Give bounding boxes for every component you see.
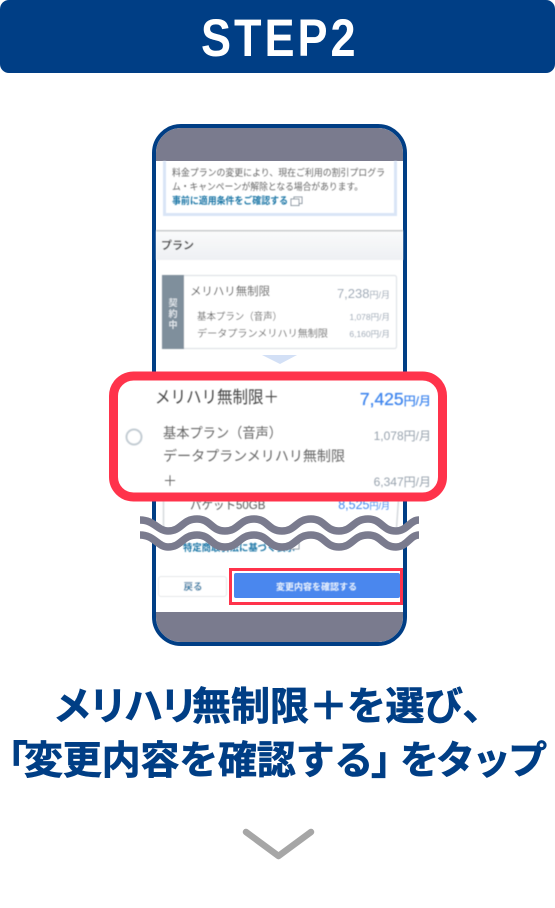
caption line 1: メリハリ [53,686,195,729]
caption [0,686,547,783]
next plan card, partly hidden: 8,525円/月 [338,498,390,512]
confirm button with red highlight [230,570,402,604]
chevron down [246,832,311,856]
next plan card, partly hidden: パケット50GB [190,499,266,512]
current plan card: 7,238円/月 [337,286,390,301]
notice box: 料金プランの変更により、現在ご利用の割引プログラ [172,167,385,179]
caption line 1: 無制限＋ [192,686,348,729]
caption line 1: を選び、 [347,686,501,729]
current plan card: データプランメリハリ無制限 [197,327,328,340]
notice box [164,161,396,214]
notice box: ム・キャンペーンが解除となる場合があります。 [172,181,363,193]
radio button [126,430,142,444]
highlighted plan card [114,376,442,497]
next plan card, partly hidden: 特定商取引法に基づく表示 [183,542,295,554]
confirm button with red highlight: 変更内容を確認する [276,581,357,592]
section heading: plan: プラン [161,239,194,252]
caption line 2: 変更内容を確認する [24,740,373,783]
wave break [140,519,419,547]
back button [158,576,226,596]
current plan card: 約 [168,308,178,319]
breakdown: 基本プラン（音声） [163,425,282,441]
current plan card: 1,078円/月 [349,312,390,322]
current plan card: 契 [168,297,178,308]
highlighted plan card: 1,078円/月 [374,429,431,443]
current plan card: 6,160円/月 [349,329,390,339]
section heading: plan [156,230,403,260]
highlighted plan card: 6,347円/月 [374,475,431,489]
current plan card [162,275,396,349]
heading: STEP2: STEP2 [201,9,359,68]
caption line 2: をタップ [400,740,547,783]
phone top bar [156,128,403,161]
next plan card, partly hidden [164,498,398,554]
phone mockup [140,126,419,644]
icon: external link [291,197,302,206]
back button: 戻る [183,582,203,593]
plan price: 7,425円/月 [360,389,431,409]
highlighted plan card: データプランメリハリ無制限 [163,448,345,464]
current plan card: 中 [168,319,178,330]
phone bottom bar [156,612,403,642]
plan name: メリハリ無制限＋ [155,388,279,407]
header banner [0,0,555,73]
notice box: 事前に適用条件をご確認する [172,195,288,207]
current plan card: 基本プラン（音声） [197,310,282,323]
highlighted plan card: ＋ [163,473,177,489]
down triangle [262,355,297,364]
caption line 2: 」 [371,740,410,783]
current plan card: メリハリ無制限 [190,284,270,298]
